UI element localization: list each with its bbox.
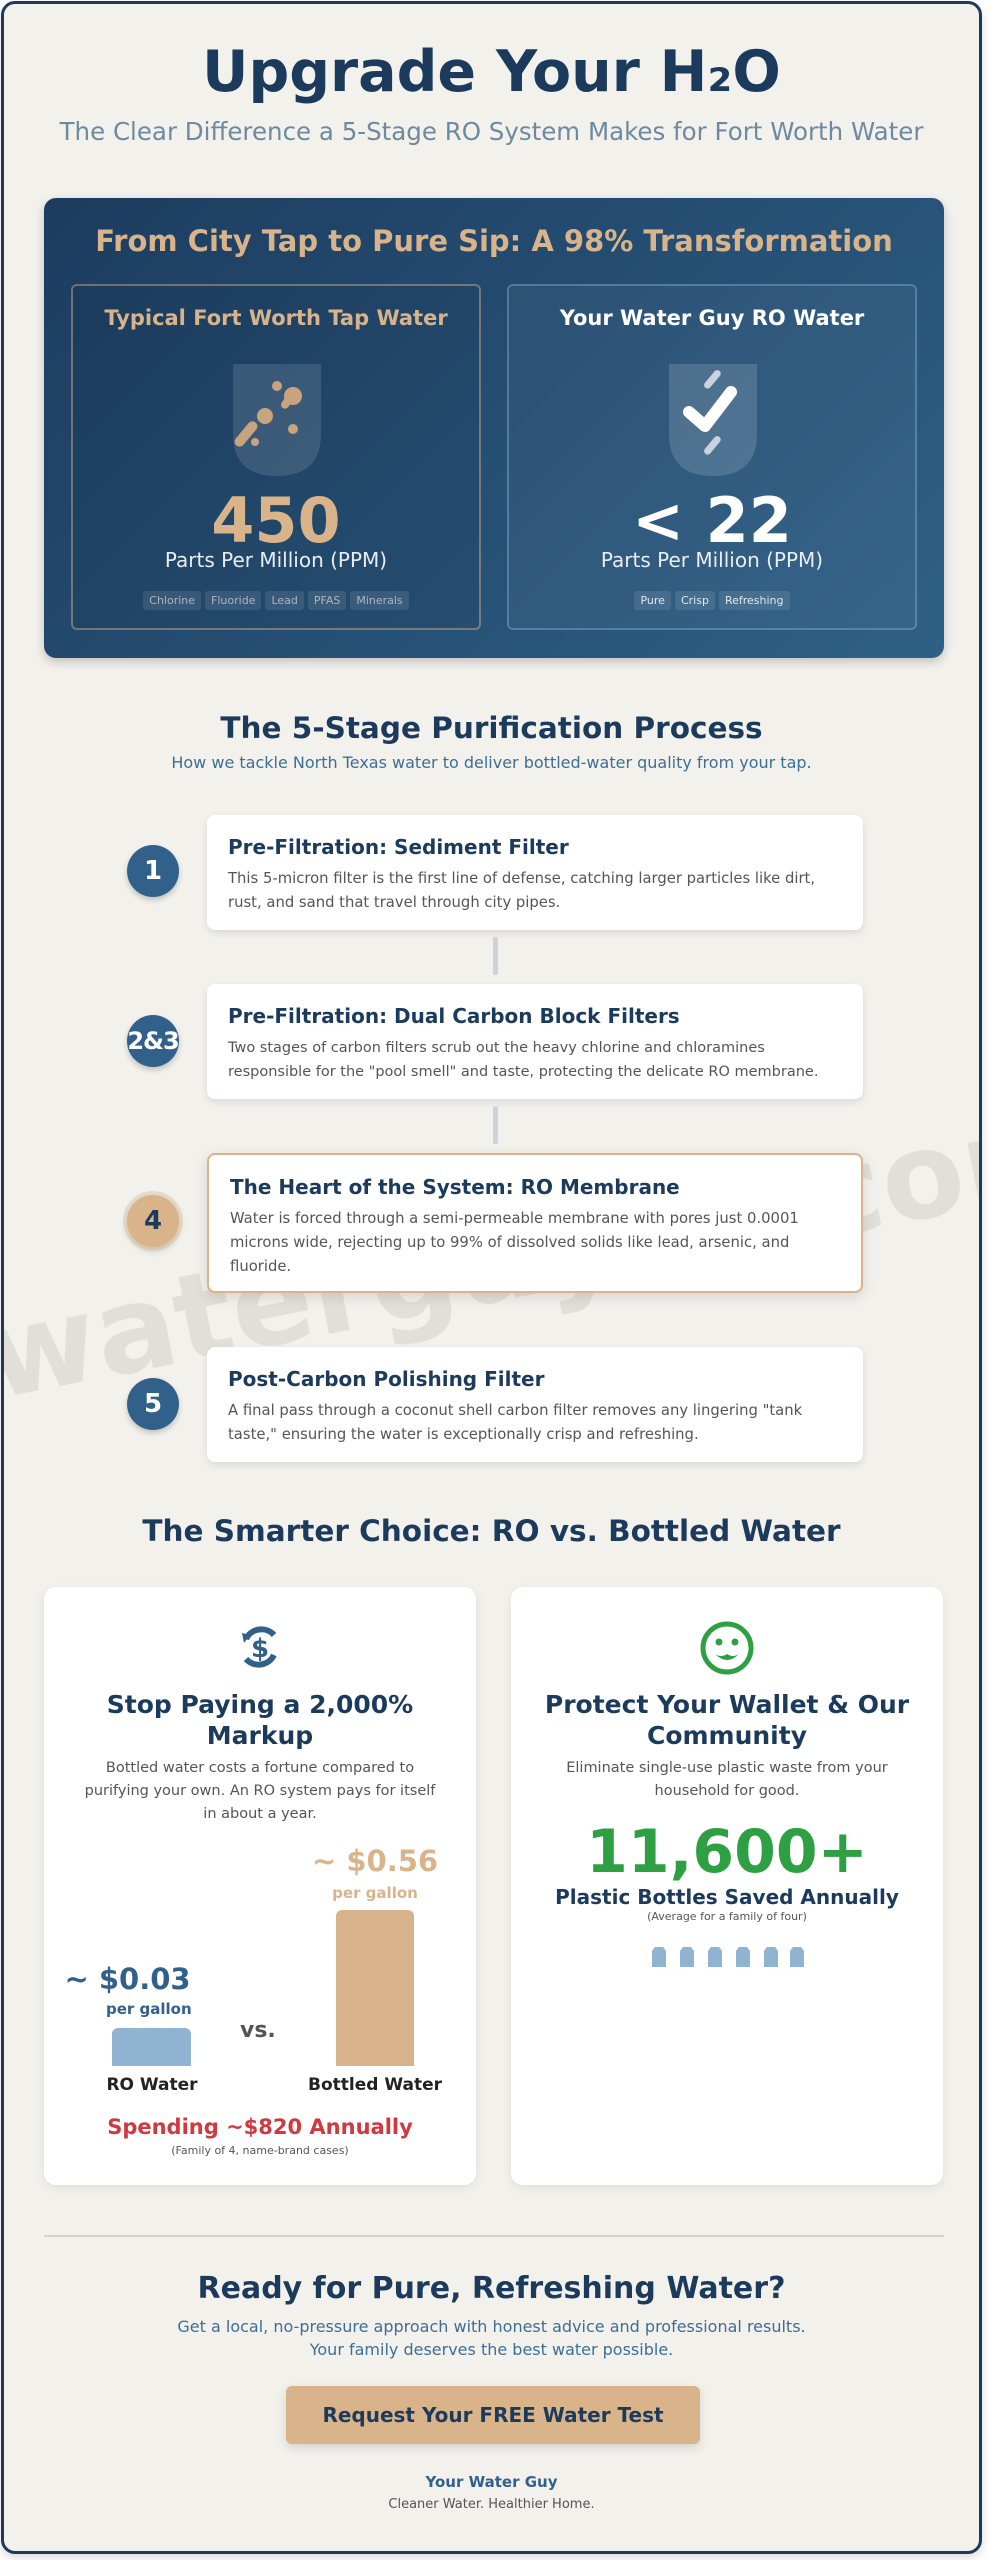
- icon: dollar cycle: $: [251, 1634, 269, 1664]
- section heading: comparison: The Smarter Choice: RO vs. Bottled Water: [142, 1514, 841, 1548]
- card heading: Your Water Guy RO Water: [560, 306, 864, 330]
- number <22: < 22: [632, 484, 792, 557]
- icon: clean glass: [669, 364, 757, 476]
- card: community: (Average for a family of four): [647, 1910, 807, 1923]
- tags: Lead: [271, 594, 298, 607]
- icons: bottles: [652, 1947, 804, 1967]
- icon: dirty glass: [233, 364, 321, 476]
- card: community: [511, 1587, 943, 2185]
- big stat: 11,600+: [586, 1817, 868, 1887]
- tags: [143, 591, 409, 610]
- card: RO water: [507, 284, 917, 630]
- tags: Minerals: [356, 594, 403, 607]
- subtitle: The Clear Difference a 5-Stage RO System Makes for Fort Worth Water: [60, 117, 923, 146]
- tags: Chlorine: [149, 594, 195, 607]
- card: community: Plastic Bottles Saved Annually: [555, 1885, 899, 1909]
- icon: dollar cycle: [242, 1626, 277, 1668]
- step 1 card: Pre-Filtration: Sediment Filter: [228, 835, 569, 859]
- bar chart: vs.: [240, 2018, 276, 2043]
- tags: Pure: [640, 594, 665, 607]
- bottled value: ~ $0.56: [312, 1844, 438, 1878]
- heading: Protect Your Wallet & Our Community: [545, 1690, 909, 1750]
- bottled bar: [336, 1910, 414, 2066]
- ppm label: Parts Per Million (PPM): [165, 548, 387, 572]
- step 2&3 card: Two stages of carbon filters scrub out the heavy chlorine and chloramines responsible for the "pool smell" and taste, protecting the delicate RO membrane.: [228, 1040, 818, 1080]
- tags: Crisp: [681, 594, 709, 607]
- step 4 card: [207, 1153, 863, 1293]
- ppm label: Parts Per Million (PPM): [601, 548, 823, 572]
- bar chart: [64, 1844, 442, 2095]
- RO bar: [112, 2028, 191, 2066]
- tags: [634, 591, 790, 610]
- panel: transformation: [44, 198, 944, 658]
- step 5 number: [127, 1378, 179, 1430]
- title: Upgrade Your H₂O: [202, 39, 781, 105]
- section subheading: How we tackle North Texas water to deliver bottled-water quality from your tap.: [171, 753, 812, 772]
- icon: smile: [700, 1622, 754, 1674]
- heading: Stop Paying a 2,000% Markup: [107, 1690, 413, 1750]
- step 5 card: [207, 1347, 863, 1462]
- description: Bottled water costs a fortune compared to purifying your own. An RO system pays for itself in about a year.: [85, 1760, 435, 1822]
- tags: PFAS: [314, 594, 340, 607]
- spending callout: Spending ~$820 Annually: [107, 2115, 413, 2139]
- card heading: Typical Fort Worth Tap Water: [104, 306, 448, 330]
- step 5 number: 5: [144, 1389, 162, 1419]
- step 1 card: This 5-micron filter is the first line of defense, catching larger particles like dirt, rust, and sand that travel through city pipes.: [228, 870, 815, 911]
- step 2&3 number: 2&3: [127, 1027, 179, 1055]
- card: cost: (Family of 4, name-brand cases): [171, 2144, 349, 2157]
- text: Cleaner Water. Healthier Home.: [388, 2497, 595, 2512]
- description: Eliminate single-use plastic waste from your household for good.: [566, 1760, 888, 1799]
- CTA text: [177, 2317, 806, 2359]
- step 5 card: A final pass through a coconut shell carbon filter removes any lingering "tank taste," ensuring the water is exceptionally crisp and refreshing.: [228, 1402, 802, 1443]
- section heading: process: The 5-Stage Purification Process: [220, 711, 763, 745]
- card: tap water: [71, 284, 481, 630]
- step 1 number: 1: [144, 856, 162, 886]
- bar chart: per gallon: [106, 2000, 192, 2018]
- step 2&3 card: [207, 984, 863, 1099]
- number 450: 450: [211, 484, 341, 557]
- step 1 card: [207, 815, 863, 930]
- step 2&3 number: [127, 1015, 179, 1067]
- button: [286, 2386, 700, 2444]
- CTA heading: Ready for Pure, Refreshing Water?: [198, 2271, 785, 2306]
- step 4 number: [127, 1195, 179, 1247]
- step 4 number: 4: [144, 1206, 162, 1236]
- RO value: ~ $0.03: [64, 1962, 191, 1996]
- step 2&3 card: Pre-Filtration: Dual Carbon Block Filters: [228, 1004, 680, 1028]
- tags: Refreshing: [725, 594, 784, 607]
- labels: RO Water: [106, 2075, 198, 2095]
- CTA text: Get a local, no-pressure approach with honest advice and professional results.: [177, 2317, 806, 2336]
- bar chart: Bottled Water: [308, 2075, 442, 2095]
- bar chart: per gallon: [332, 1884, 418, 1902]
- divider: [44, 2235, 944, 2237]
- button: Request Your FREE Water Test: [322, 2403, 664, 2427]
- tags: Fluoride: [211, 594, 255, 607]
- step 1 number: [127, 845, 179, 897]
- footer brand: Your Water Guy: [426, 2473, 557, 2491]
- panel heading: From City Tap to Pure Sip: A 98% Transformation: [95, 224, 893, 258]
- CTA text: Your family deserves the best water possible.: [310, 2340, 673, 2359]
- card: cost: [44, 1587, 476, 2185]
- step 4 card: Water is forced through a semi-permeable membrane with pores just 0.0001 microns wide, rejecting up to 99% of dissolved solids like lead, arsenic, and fluoride.: [230, 1210, 799, 1275]
- step 4 card: The Heart of the System: RO Membrane: [230, 1175, 680, 1199]
- step 5 card: Post-Carbon Polishing Filter: [228, 1367, 544, 1391]
